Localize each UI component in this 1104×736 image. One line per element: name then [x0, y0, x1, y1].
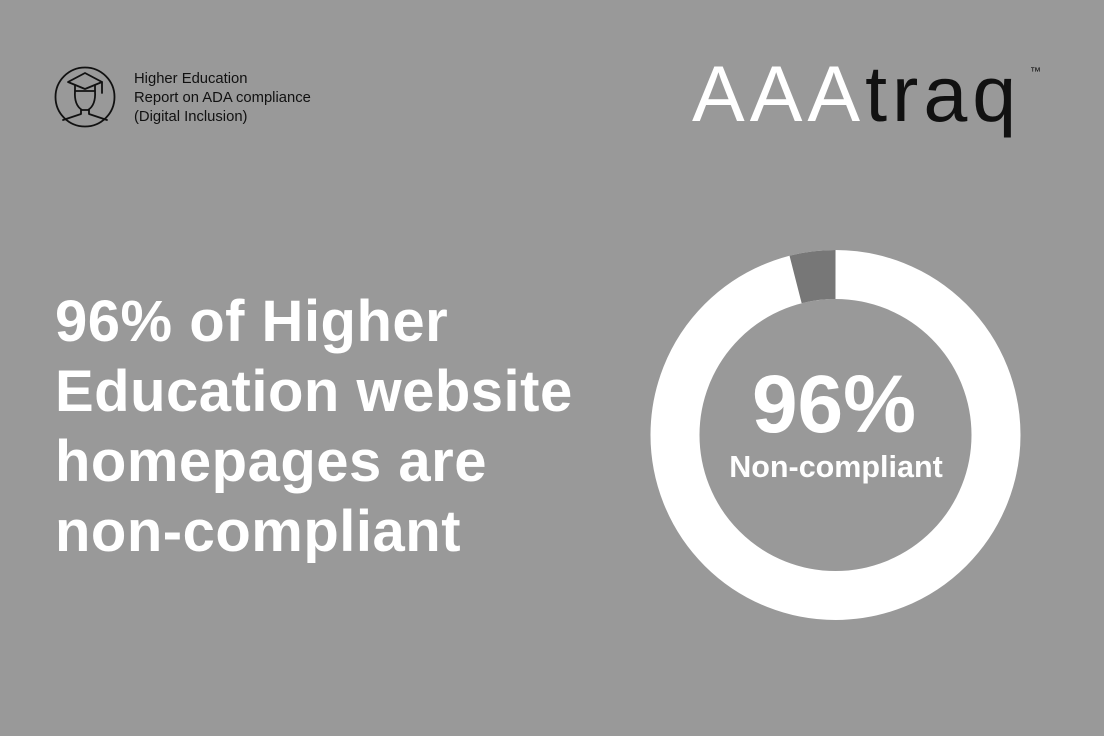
center label: Non-compliant: [729, 450, 943, 484]
logo: AAAtraq: [692, 49, 1021, 138]
donut chart: [650, 250, 1020, 620]
headline: Education website: [55, 359, 573, 424]
center label: 96%: [752, 359, 916, 450]
logo: ™: [1030, 66, 1041, 78]
headline: 96% of Higher: [55, 289, 448, 354]
header text: (Digital Inclusion): [134, 109, 247, 125]
header text: [134, 71, 311, 125]
center label: [729, 359, 943, 484]
headline: non-compliant: [55, 499, 461, 564]
icon: graduate: [54, 66, 116, 128]
header text: Report on ADA compliance: [134, 90, 311, 106]
headline: homepages are: [55, 429, 487, 494]
headline: [55, 289, 573, 564]
header text: Higher Education: [134, 71, 248, 87]
ring: compliant/noncompliant: [675, 274, 996, 596]
